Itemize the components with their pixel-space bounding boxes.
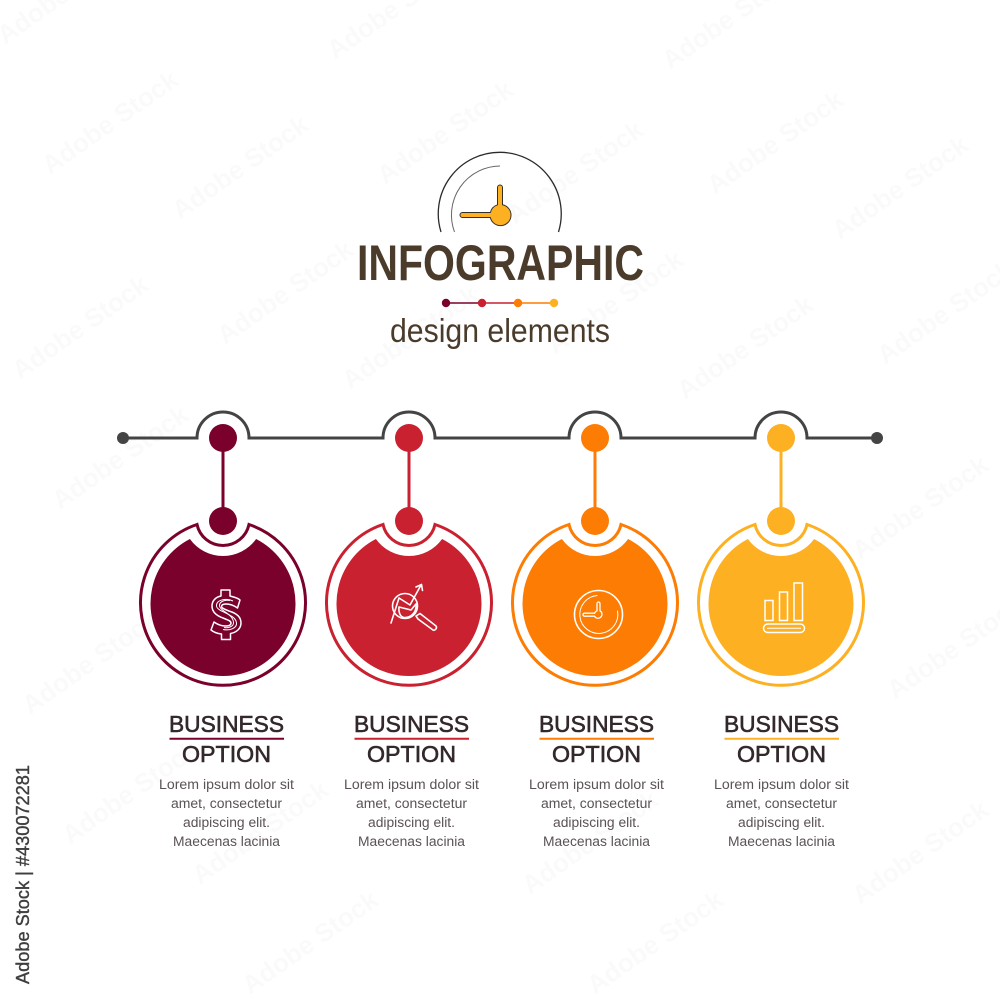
text block: option 2: BUSINESS [354, 711, 469, 737]
text block: option 4: Lorem ipsum dolor sit [714, 777, 849, 792]
text block: option 4 [714, 711, 849, 849]
icon: clock [574, 590, 622, 638]
text block: option 3: Maecenas lacinia [543, 834, 651, 849]
subtitle: design elements [390, 312, 610, 349]
icon: bar chart [764, 583, 804, 632]
title dots divider [442, 299, 558, 307]
text block: option 1: BUSINESS [169, 711, 284, 737]
text block: option 3: adipiscing elit. [553, 815, 640, 830]
text block: option 3: OPTION [552, 741, 641, 767]
text block: option 2: Lorem ipsum dolor sit [344, 777, 479, 792]
text block: option 3 [529, 711, 664, 849]
text block: option 3: Lorem ipsum dolor sit [529, 777, 664, 792]
icon: title clock [438, 152, 561, 232]
text block: option 1: Lorem ipsum dolor sit [159, 777, 294, 792]
text block: option 2: amet, consectetur [356, 796, 468, 811]
text block: option 3: amet, consectetur [541, 796, 653, 811]
text block: option 2: OPTION [367, 741, 456, 767]
icon: magnifier with trend [391, 584, 436, 630]
stock id caption: Adobe Stock | #430072281 [13, 765, 33, 984]
text block: option 2 [344, 711, 479, 849]
text block: option 3: BUSINESS [539, 711, 654, 737]
text block: option 4: amet, consectetur [726, 796, 838, 811]
title: INFOGRAPHIC [357, 235, 644, 291]
text block: option 1: Maecenas lacinia [173, 834, 281, 849]
text block: option 1 [159, 711, 294, 849]
panel: step 2 [326, 424, 492, 685]
text block: option 2: Maecenas lacinia [358, 834, 466, 849]
panel: step 1 [140, 424, 305, 685]
timeline [117, 412, 883, 444]
icon: dollar [211, 590, 241, 640]
text block: option 4: OPTION [737, 741, 826, 767]
text block: option 1: OPTION [182, 741, 271, 767]
text block: option 4: adipiscing elit. [738, 815, 825, 830]
panel: step 3 [512, 424, 677, 685]
text block: option 4: BUSINESS [724, 711, 839, 737]
text block: option 2: adipiscing elit. [368, 815, 455, 830]
panel: step 4 [698, 424, 863, 685]
text block: option 4: Maecenas lacinia [728, 834, 836, 849]
text block: option 1: adipiscing elit. [183, 815, 270, 830]
text block: option 1: amet, consectetur [171, 796, 283, 811]
